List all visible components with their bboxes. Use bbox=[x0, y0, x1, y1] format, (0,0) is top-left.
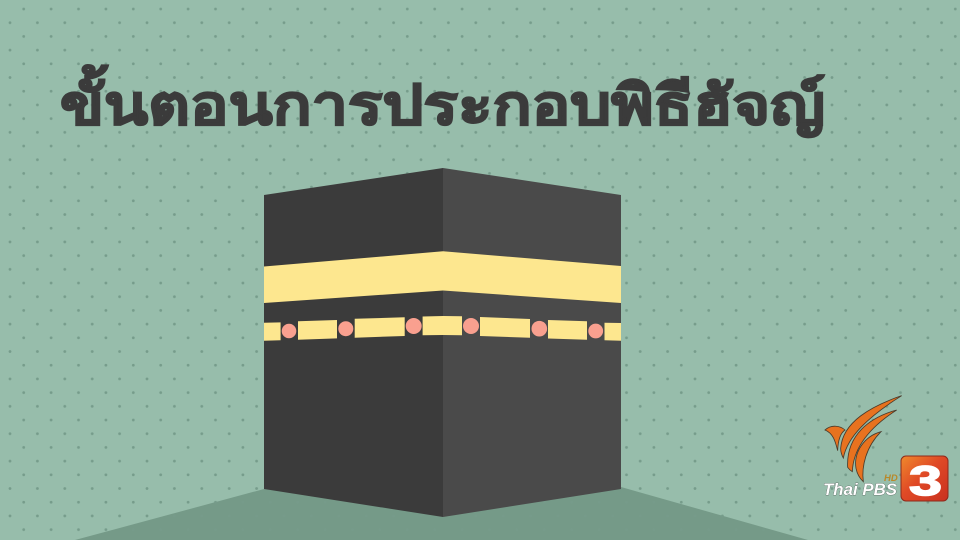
kaaba rose ornaments bbox=[282, 318, 603, 338]
logo channel badge: 3 bbox=[909, 457, 942, 504]
logo: Thai PBS HD 3 bbox=[823, 396, 948, 504]
kaaba upper gold band bbox=[264, 251, 621, 303]
kaaba right face bbox=[443, 168, 621, 517]
kaaba lower gold band segments bbox=[264, 316, 621, 341]
logo wordmark: Thai PBS bbox=[823, 481, 897, 499]
floor bbox=[75, 487, 808, 540]
icon: bird and feathers bbox=[825, 396, 902, 482]
logo HD mark: HD bbox=[884, 473, 898, 484]
title: ขั้นตอนการประกอบพิธีฮัจญ์ bbox=[60, 65, 825, 138]
kaaba bbox=[264, 168, 621, 517]
kaaba left face bbox=[264, 168, 443, 517]
